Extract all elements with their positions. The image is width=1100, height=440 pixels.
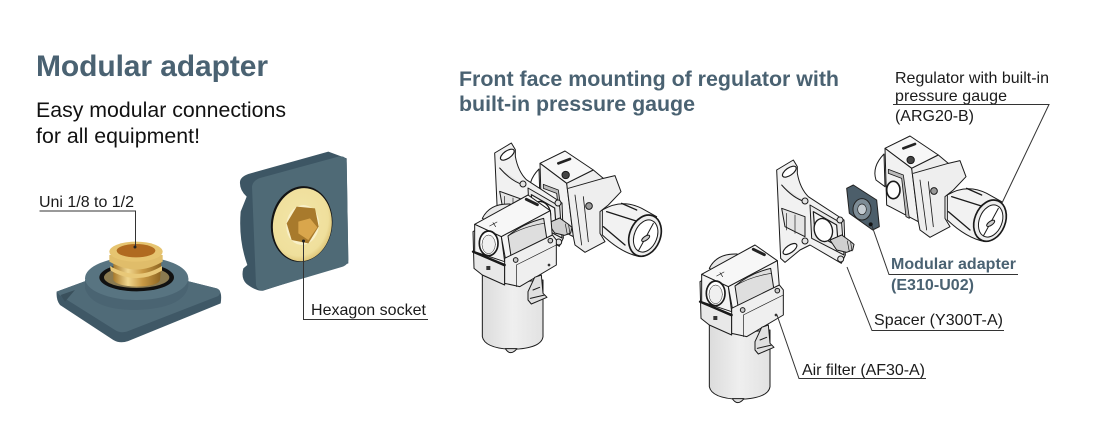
subtitle text: Easy modular connections [36,98,286,122]
callout: Air filter AF30-A [777,315,926,379]
illustration: modular adapter part [847,185,879,230]
heading: front face mounting: Front face mounting of regulator with [459,67,839,91]
callout: Hexagon socket: Hexagon socket [311,302,427,319]
callout: regulator with built-in pressure gauge: pressure gauge [895,88,1007,105]
callout: regulator with built-in pressure gauge: Regulator with built-in [895,70,1049,87]
callout: Uni 1/8 to 1/2 [39,194,136,248]
illustration: exploded regulator [875,136,1012,246]
callout: Modular adapter E310-U02 [872,226,1018,294]
title: Modular adapter [36,50,268,83]
callout: regulator with built-in pressure gauge [893,70,1049,203]
illustration: exploded air filter [700,245,783,403]
photo: adapter, brass thread up [57,242,221,342]
illustration: exploded spacer bracket [777,160,854,263]
subtitle text: for all equipment! [36,124,200,148]
illustration: assembled bracket, regulator and filter [473,143,667,353]
callout: Air filter AF30-A: Air filter (AF30-A) [802,362,925,379]
callout: Uni 1/8 to 1/2: Uni 1/8 to 1/2 [39,194,134,211]
callout: regulator with built-in pressure gauge: (ARG20-B) [895,108,974,125]
callout: Hexagon socket [302,240,428,320]
callout: Modular adapter E310-U02: (E310-U02) [891,277,974,294]
callout: Spacer Y300T-A [847,267,1004,330]
callout: Spacer Y300T-A: Spacer (Y300T-A) [874,312,1003,329]
callout: Modular adapter E310-U02: Modular adapter [891,256,1016,273]
heading: front face mounting: built-in pressure gauge [459,92,695,116]
photo: adapter, hexagon socket face [240,152,348,291]
